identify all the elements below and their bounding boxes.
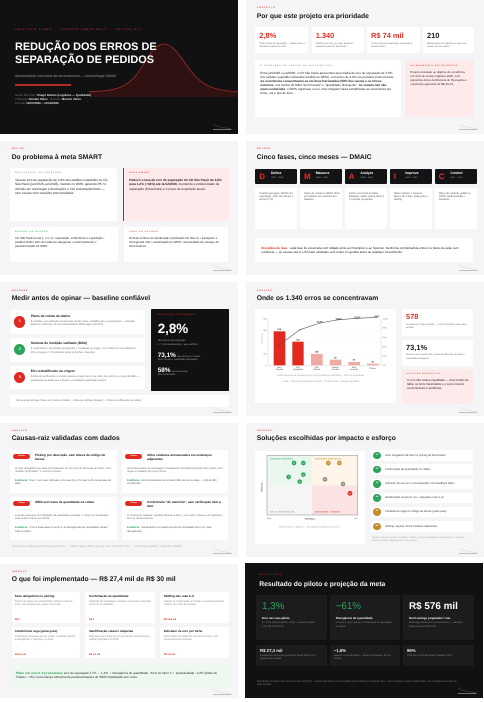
title: Onde os 1.340 erros se concentravam: [257, 295, 378, 302]
accent bar: [15, 84, 71, 86]
card: blind check: Conferência cega (poka-yoke): [15, 629, 57, 633]
list: solution 3: [371, 479, 473, 489]
cause: picking: +46 pts: [18, 455, 25, 457]
phase I: I: [394, 172, 396, 181]
kicker: MÉTODO: [257, 148, 271, 150]
phase C: Control: [450, 171, 462, 175]
list: solution 1: [371, 450, 473, 461]
card: quantity divergence: no turno 3, após reativar a confirmação de quantidade no coletor: [336, 622, 392, 628]
card: stratified error: A folha de verificação no coletor passou a exigir turno, rua, SKU, tipo de item e modo de falha — exatamente as fatias que o Pareto e a Ishikawa exploraram depois.: [31, 375, 140, 382]
cause: WMS: [10, 497, 117, 540]
kicker: RESULTADOS: [259, 574, 282, 576]
card: productivity: [330, 645, 400, 666]
card: visual id: Identificação visual e etiquetas: [89, 629, 133, 633]
panel: impact-effort matrix: GANHOS RÁPIDOS: [270, 457, 293, 460]
cause: similar SKUs: SKUs similares armazenados em endereços adjacentes: [147, 453, 212, 461]
card: error rate: Taxa de erro de separação — média de 6× a referência interna de 0,5%: [259, 42, 305, 48]
card: investment: Investimento das ações priorizadas (limite: R$ 30 mil) = payback de 3 meses: [260, 655, 316, 660]
card: slotting: [160, 592, 229, 623]
project metadata: [15, 93, 91, 105]
card: quantity divergence: Divergência de quantidade: [336, 616, 372, 620]
panel: pareto chart: 92,6%: [336, 318, 342, 320]
slide: solutions: [246, 423, 484, 557]
kicker: DEFINE: [12, 148, 25, 150]
cause: picking: [10, 450, 117, 493]
card: productivity: Impacto na produtividade — dentro do limite de −3% do Charter: [334, 655, 390, 660]
phase A: Pareto por modo de falha, Ishikawa, matriz causa efeito e 5 porquês no gemba: [349, 192, 384, 201]
list: solution 1: Scan obrigatório de EAN no picking de fracionados: [385, 454, 446, 457]
two failure modes: 73,1% dos erros em 2 modos: [158, 352, 200, 359]
card: scan: R$ 0: [15, 618, 20, 620]
panel: pareto chart: 600: [264, 330, 267, 332]
cause: WMS: WMS sem trava de quantidade na coleta: [35, 500, 94, 504]
callout: pilot result: [12, 664, 229, 688]
card: indicator: [160, 627, 229, 658]
slide: cover: [0, 0, 238, 134]
cause: similar SKUs: [122, 450, 228, 493]
panel: impact-effort matrix: B2: [328, 462, 330, 464]
panel: pareto chart: divergente: [293, 369, 303, 371]
title: SEPARAÇÃO DE PEDIDOS: [15, 54, 154, 66]
slide: measure: [0, 282, 238, 416]
panel: impact-effort matrix: alto: [355, 517, 358, 519]
kicker: MEASURE: [12, 290, 28, 292]
slide: results: [245, 563, 483, 698]
panel: pareto chart: 200: [264, 353, 267, 355]
panel: pareto chart: 60: [353, 359, 356, 362]
card: data collection plan: 1: [19, 319, 21, 323]
cause: similar SKUs: +38 pts: [130, 455, 137, 457]
title: Cinco fases, cinco meses — DMAIC: [257, 154, 371, 160]
panel: confirmed baseline: [151, 309, 229, 391]
phase D: 13/07 – 07/08: [271, 177, 283, 179]
kicker: IMPROVE: [12, 570, 28, 572]
title: Medir antes de opinar — baseline confiável: [12, 295, 150, 302]
card: data collection plan: Plano de coleta de dados: [31, 314, 70, 318]
card: blind check: Conferente escaneia sem ver a lista; o sistema aponta a divergência. 2 estações no piloto.: [15, 635, 75, 641]
card: errors per month: 1.340: [316, 30, 334, 40]
icon: logo: [213, 548, 232, 554]
panel: out of scope: [124, 227, 228, 262]
card: complaints: [423, 27, 474, 53]
panel: pareto chart: Item: [352, 367, 356, 369]
card: visual id: R$ 3,2 mil: [89, 653, 100, 656]
card: indicator: Painel diário do WMS lido na troca de turno, com reconhecimento semanal.: [164, 635, 218, 641]
title: Do problema à meta SMART: [12, 154, 102, 160]
icon: logo: [213, 407, 232, 413]
card: hard savings: R$ 576 mil: [409, 601, 458, 612]
cause: memory check: Evidência: Separadores no quartil superior de velocidade têm 2,3× mais divergências.: [127, 526, 212, 533]
icon: logo: [459, 265, 478, 271]
card: visual id: [85, 627, 155, 658]
phase I: [390, 169, 432, 229]
card: investment: R$ 27,4 mil: [260, 648, 282, 653]
list: solution 6: B3: [376, 525, 378, 527]
callout: phase discipline: [255, 238, 473, 262]
list: solution 1: A1: [376, 454, 378, 456]
card: scan: Trecho de coleta reparametrizado: sistema reduz de 0,5%, com bloqueio de avanço sem scan.: [15, 600, 73, 606]
card: data collection plan: [10, 310, 145, 334]
panel: pareto chart: 168: [315, 351, 319, 354]
card: quantity: R$ 0: [89, 618, 94, 620]
panel: impact-effort matrix: DESCARTE / REVER: [315, 510, 340, 513]
panel: pareto chart: 40: [372, 361, 374, 363]
list: solution 5: [371, 507, 473, 517]
card: productivity: −1,8%: [334, 648, 346, 653]
card: OTIF: [403, 645, 474, 666]
card: visual id: Etiquetas com código de cor por família, demarcação e padrão fotográfico no POP.: [89, 635, 150, 641]
panel: pareto chart: 800: [264, 318, 267, 320]
card: cost: [367, 27, 420, 53]
panel: pareto chart: Pareto dos erros de separação por modo de falha (ocorrências) — linha: % acumulado.: [277, 375, 365, 377]
phase M: 10/08 – 11/09: [316, 177, 328, 179]
panel: executive reading: [402, 369, 473, 404]
phase C: 23/11 – 11/12: [450, 177, 462, 179]
card: scan: Scan obrigatório no picking: [15, 594, 54, 598]
panel: impact-effort matrix: baixo: [267, 517, 272, 519]
panel: pareto chart: Fonte: 1.340 erros registrados no WMS · CD São Paulo · baseline ago/2026: [283, 381, 359, 383]
card: hard savings: Hard savings projetados / ano: [409, 616, 450, 620]
card: measurement system: Sistema de medição validado (MSA): [31, 341, 87, 345]
phase I: 19/10 – 20/11: [405, 177, 417, 179]
footer: tools: [10, 395, 229, 407]
list: solution 2: [371, 464, 473, 475]
card: pilot error: vs. 4,7% antes do piloto (−69%) — meta do projeto: 1,2% até 11/12/2026: [262, 622, 315, 628]
phase M: Measure: [316, 171, 329, 175]
panel: pareto chart: SKU: [315, 367, 319, 369]
panel: impact-effort matrix: D1: [349, 492, 351, 494]
kicker: ANALYZE: [257, 290, 273, 292]
card: slotting: Análise de similaridade em família e reendereçamento noturno em 2 fins de semana.: [164, 600, 224, 606]
title: Resultado do piloto e projeção da meta: [259, 580, 385, 588]
card: indicator: R$ 0,8 mil: [164, 653, 175, 656]
list: solution 3: Indicador de erro por turno/separador com feedback diário: [385, 482, 454, 485]
phase M: M: [304, 172, 311, 181]
panel: pareto chart: avariado: [350, 369, 359, 371]
slide: define: [0, 141, 238, 275]
panel: in scope: DENTRO DO ESCOPO: [15, 231, 49, 233]
card: cost: R$ 74 mil: [371, 30, 404, 40]
card: OTIF: 96%: [407, 648, 416, 653]
cause: memory check: [122, 497, 228, 540]
panel: pareto chart: 92: [334, 357, 337, 359]
list: solution 2: Confirmação de quantidade no coletor: [385, 468, 431, 471]
kicker: IMPROVE: [257, 430, 273, 432]
panel: problem statement: [10, 168, 117, 221]
phase I: Matriz esforço × impacto, kaizen de 5 dias, poka-yoke e slotting: [394, 192, 428, 201]
kicker: ANALYZE: [12, 430, 28, 432]
card: errors per month: [312, 27, 364, 53]
title: Por que este projeto era prioridade: [257, 12, 369, 20]
card: complaints: Reclamações de clientes por mês com causa “erro no pedido”: [427, 42, 466, 48]
panel: SMART goal: Reduzir a taxa de erro de separação do CD São Paulo de 2,8% para 1,2% (−64%) até 11/12/2026, mantendo a produtividade de separação (linhas/hora) e o prazo de expedição atuais.: [129, 178, 222, 191]
list: solution 5: B2: [376, 510, 378, 512]
card: stratified error: [10, 366, 145, 389]
card: pilot error: 1,3%: [262, 601, 284, 612]
card: 578: Amostras por “item trocado” — 43,1% do total e maior falha isolada: [406, 324, 467, 329]
panel: executive reading: O erro não estava espalhado — dois modos de falha, os itens fracionados e o turno noturno concentravam o problema.: [407, 378, 469, 390]
panel: pareto chart: 20%: [383, 355, 387, 358]
cause: picking: O scan obrigatório na coleta foi desativado em um pico de demanda de 2024, como medida “temporária”, e nunca foi revisto.: [15, 466, 111, 473]
card: slotting: R$ 14,8 mil: [164, 618, 176, 620]
phase C: [435, 169, 477, 229]
icon: logo: [458, 688, 476, 694]
panel: pareto chart: Item: [278, 367, 282, 369]
panel: in scope: [10, 227, 118, 262]
list: solution 4: [371, 493, 473, 503]
panel: out of scope: FORA DO ESCOPO: [129, 231, 158, 233]
card: errors per month: Pedidos com erro por mês, de 48 mil expedidos pelo CD São Paulo: [316, 42, 353, 48]
title: O que foi implementado — R$ 27,4 mil de R$ 30 mil: [12, 576, 176, 583]
phase A: 14/09 – 16/10: [360, 177, 373, 179]
card: 73,1%: dos erros em apenas dois modos de falha: item trocado e quantidade divergente: [406, 354, 465, 360]
slide: root causes: [0, 423, 238, 557]
icon: logo: [459, 407, 478, 413]
list: solution 4: Identificação visual por cor + etiquetas (ruas 5–9): [385, 496, 444, 499]
phase M: Plano de coleta no WMS, MSA por atributo na conferência e baseline: [304, 192, 339, 201]
icon: logo: [213, 689, 232, 695]
phase A: A: [349, 172, 354, 181]
list: solution 3: A3: [376, 482, 378, 484]
title: REDUÇÃO DOS ERROS DE: [15, 40, 157, 52]
panel: pareto chart: 0%: [383, 365, 386, 367]
card: pilot error: [256, 595, 327, 640]
project metadata: Período 13/07/2026 – 11/12/2026: [15, 101, 59, 105]
chart: bell curve: [89, 44, 238, 97]
card: error rate: [255, 27, 308, 53]
kicker: LEAN SEIS SIGMA · PROJETO GREEN BELT · GB-2026-031: [15, 29, 142, 31]
list: solution 4: A4: [376, 496, 378, 498]
cause: WMS: Evidência: Com a trava ativa no turno 3, as divergências de quantidade caíram 61% no piloto.: [15, 526, 107, 533]
panel: executive reading: LEITURA EXECUTIVA: [407, 373, 441, 375]
panel: strategic alignment: [405, 60, 474, 117]
panel: pareto chart: 402: [297, 339, 300, 341]
panel: pareto chart: invertido: [332, 369, 340, 371]
cause: similar SKUs: Itens fracionados de embalagem visualmente semelhante ficavam lado a lado, sem regra no cadastro de novos SKUs.: [127, 466, 223, 473]
fractioned items: itens fracionados: [158, 374, 175, 376]
panel: pareto chart: Pedido: [332, 367, 339, 369]
panel: in scope: CD São Paulo (ruas 1, 2 e 3) • separação, conferência e expedição • pedidos B2B e B2C de todas as categorias • endereçamento e parametrização do WMS: [15, 236, 104, 248]
card: quantity divergence: [330, 595, 400, 640]
list: solution 6: [371, 521, 473, 532]
panel: problem: Entre jan/2026 e jun/2026, o CD São Paulo apresentou taxa média de erro de separação de 2,8% dos pedidos expedidos (baseline medido no WMS), com picos de 3,6% em períodos promocionais. As ocorrências concentravam-se em itens fracionados (58% dos casos) e os turnos noturnos, nos modos de falha “item trocado” e “quantidade divergente”. As causas-raiz não eram conhecidas: o WMS registrava o erro, mas ninguém havia estratificado as ocorrências por turno, rua e tipo de item.: [260, 71, 394, 95]
icon: logo: [213, 124, 232, 130]
card: investment: [256, 645, 327, 666]
panel: impact-effort matrix: C2: [342, 483, 344, 485]
cause: WMS: +34 pts: [18, 502, 25, 504]
panel: pareto chart: 578: [278, 329, 282, 331]
panel: out of scope: Demais centros de distribuição (replicação em fase 2) • transporte e entrega last mile • substituição do WMS • acuracidade de estoque de fornecedores: [129, 236, 219, 248]
panel: pareto chart: 100%: [383, 318, 388, 320]
panel: pareto chart: 0: [266, 365, 267, 367]
baseline note: [158, 339, 198, 346]
card: quantity: [85, 592, 155, 623]
panel: impact-effort matrix: B3: [339, 462, 341, 464]
panel: impact-effort matrix: GRANDES PROJETOS: [315, 458, 342, 460]
panel: pareto chart: trocado: [276, 369, 283, 371]
panel: impact-effort matrix: ESFORÇO →: [305, 518, 318, 520]
card: cost: Custo mensal de reentrega, devolução e ressarcimento: [371, 42, 412, 48]
callout: phase discipline: Disciplina de fase: cada fase foi encerrada com tollgate junto ao Champion e ao Sponsor. Nenhuma contramedida entrou no plano de ação sem evidência — as causas-raiz A e B foram validadas com testes no gemba antes de qualquer investimento.: [261, 246, 459, 254]
project metadata: Champion Renata Sales Sponsor Marcos Vieira: [15, 97, 81, 101]
slide: context: [246, 0, 484, 134]
panel: pareto chart: 85,7%: [317, 321, 323, 323]
panel: impact-effort matrix: Matriz Esforço × Impacto — 10 soluções avaliadas pelo kaizen: [279, 525, 340, 528]
panel: pareto chart: 40%: [383, 346, 387, 348]
panel: strategic alignment: Projeto vinculado ao objetivo de excelência em nível de serviço logístico 2026, com patrocínio direto da Diretoria de Operações e orçamento aprovado de R$ 30 mil.: [410, 70, 467, 86]
card: quantity divergence: −61%: [336, 601, 361, 612]
card: pilot error: Erro nas ruas-piloto: [262, 616, 289, 620]
panel: pareto chart: 97,0%: [355, 317, 361, 319]
cause: WMS: A tarefa avançava sem digitação da quantidade coletada: o campo foi desativado para reduzir toques por tarefa.: [15, 514, 108, 520]
card: 73,1%: 73,1%: [406, 343, 427, 352]
footer: tools: Ferramentas da fase: Plano de Coleta de Dados • MSA por atributo (Kappa) • Folha de verificação no coletor: [16, 399, 141, 402]
footer note: Resultados do piloto nas ruas 5–9 (out–nov/2026) · rollout para todo o CD executado com o Plano de Controle ativo · hard savings a serem confirmados com o Financeiro ao fim do Gate Control.: [257, 680, 457, 686]
card: scan: [12, 592, 80, 623]
baseline note: n = 1.340 pedidos/mês · ago–set/2026: [158, 344, 198, 346]
phase D: D: [259, 172, 265, 181]
phase A: Analyze: [360, 171, 373, 175]
panel: impact-effort matrix: C1: [324, 478, 326, 480]
panel: pareto chart: 100%: [374, 316, 380, 318]
footer: tools: Ferramentas: Ishikawa (brainstorming de 38 Xs) → Matriz Causa e Efeito (nota de corte: 120 pts de 270) → 5 Porquês no gemba + testes de validação: [12, 545, 182, 548]
slide: implemented: [0, 564, 238, 698]
card: measurement system: [10, 338, 145, 362]
cause: picking: Evidência: Rua 7 com scan replicado: erro caiu de 4,7% para 1,2% na semana de teste.: [15, 479, 111, 485]
panel: pareto chart: Ocorrências: [261, 334, 263, 344]
kicker: CONTEXTO: [257, 7, 275, 9]
panel: pareto chart: 80%: [383, 327, 387, 330]
title: [15, 40, 157, 66]
slide: pareto: [246, 282, 484, 416]
cause: memory check: Conferência “de memória”, sem verificação item a item: [147, 500, 221, 508]
icon: logo: [459, 124, 478, 130]
phase D: [255, 169, 297, 229]
title: Causas-raiz validadas com dados: [12, 435, 120, 442]
card: 578: 578: [406, 312, 418, 321]
phase A: [345, 169, 387, 229]
card: hard savings: [403, 595, 474, 640]
phase M: [300, 169, 342, 229]
panel: impact-effort matrix: A4: [288, 476, 290, 478]
card: stratified error: 3: [19, 375, 21, 379]
title: Soluções escolhidas por impacto e esforço: [257, 435, 396, 442]
panel: impact-effort matrix: [255, 451, 365, 544]
cause: memory check: +30 pts: [130, 502, 137, 504]
card: error rate: 2,8%: [259, 30, 276, 40]
panel: impact-effort matrix: A2: [303, 462, 305, 464]
card: stratified error: Erro estratificado na origem: [31, 369, 75, 373]
panel: impact-effort matrix: IMPACTO →: [261, 480, 264, 491]
card: blind check: [12, 627, 80, 658]
two failure modes: (item trocado + quantidade divergente): [158, 359, 198, 361]
panel: pareto chart: [255, 309, 396, 403]
card: OTIF: OTIF pós no CD São Paulo (baseline: 91%): [407, 655, 452, 657]
card: 73,1%: [402, 340, 473, 366]
baseline note: Taxa de erro de separação: [158, 340, 185, 342]
phase I: Improve: [405, 171, 419, 175]
panel: impact-effort matrix: A1: [293, 462, 295, 464]
panel: pareto chart: faltante: [314, 369, 321, 371]
label: BASELINE CONFIRMADA: [158, 314, 197, 316]
callout: pilot result: Piloto nas ruas 5–9 (3 semanas): erro de separação 4,7% → 1,3% • divergência de quantidade −61% no turno 3 • produtividade −1,8% (limite do Charter: −3%). Governança trimestral de parametrizações do WMS implantada sem custo.: [16, 671, 217, 679]
panel: impact-effort matrix: B1: [299, 481, 301, 483]
panel: strategic alignment: ALINHAMENTO ESTRATÉGICO: [410, 64, 458, 66]
icon: logo: [459, 548, 478, 554]
phase D: Define: [271, 171, 281, 175]
panel: impact-effort matrix: BAIXA PRIORIDADE: [270, 510, 295, 513]
panel: problem statement: DECLARAÇÃO DO PROBLEMA: [15, 172, 62, 174]
project metadata: Green Belt líder Thiago Ramos (Logística — Qualidade): [15, 93, 91, 97]
card: measurement system: 2: [19, 347, 21, 351]
card: measurement system: 6 conferentes × 30 pedidos preparados × 3 rodadas às cegas, com critério de concordância ≥ 90% e Kappa ≥ 0,75 atendido antes de fechar o baseline.: [31, 347, 136, 354]
card: quantity: Digitação de quantidade coletada com dupla verificação acima de 10 unidades.: [89, 600, 151, 606]
panel: SMART goal: [123, 168, 229, 221]
card: hard savings: Reentrega, devolução e ressarcimento — validação Financeira em 09/07/2026: [409, 622, 462, 628]
panel: problem: [255, 60, 401, 117]
fractioned items: 58% dos erros eram: [158, 367, 187, 374]
note: legend: Verde: quick wins (piloto imediato) · Âmbar: projetos estratégicos decorrentes no Improve · Cinza/vermelho: registrados fora do projeto: [372, 536, 466, 542]
panel: pareto chart: 60%: [383, 337, 387, 339]
list: solution 2: A2: [376, 468, 378, 470]
cause: picking: Picking por descrição, sem leitura de código de barras: [35, 453, 105, 461]
subtitle: Apresentação executiva de encerramento — metodologia DMAIC: [15, 74, 117, 78]
big number: 2,8%: [158, 321, 188, 336]
card: indicator: Indicador de erro por turno: [164, 629, 202, 633]
phase D: Charter aprovado, SIPOC da expedição, VOC de clientes e árvore CTQ: [259, 192, 293, 201]
card: complaints: 210: [427, 30, 439, 40]
cause: memory check: O conferente validava o pedido olhando a lista, o que reduz a chance de capturar o erro na última barreira.: [127, 514, 223, 520]
panel: problem: O PROBLEMA NO CENTRO DE DISTRIBUIÇÃO: [260, 64, 333, 66]
panel: impact-effort matrix: A3: [303, 474, 305, 476]
slide: method DMAIC: [246, 141, 484, 275]
cause: similar SKUs: Evidência: Itens fracionados concentram 58% dos erros vitais — 568 de 980 ocorrências.: [127, 479, 217, 485]
card: 578: [402, 309, 473, 336]
card: slotting: Slotting das ruas 5–9: [164, 594, 194, 598]
card: blind check: R$ 8,6 mil: [15, 653, 26, 656]
panel: problem statement: Taxa de erro de separação de 2,8% dos pedidos expedidos no CD São Paulo (jan/2026–jun/2026), medido no WMS, gerando R$ 74 mil/mês em reentregas e devoluções e 210 reclamações/mês — sem causas nem soluções preconcebidas.: [15, 178, 108, 195]
card: data collection plan: 8 medidas com definição operacional escrita, fonte, estratificação e responsável — extração diária de 100% dos +3.200 pedidos/dia do WMS (ago–set/2026).: [31, 320, 135, 326]
panel: pareto chart: Outros: [370, 368, 376, 370]
icon: logo: [213, 265, 232, 271]
list: solution 6: Slotting: separar SKUs similares adjacentes: [385, 525, 437, 528]
panel: SMART goal: META SMART: [129, 172, 150, 174]
panel: pareto chart: Qtd.: [296, 367, 300, 369]
list: solution 5: Conferência cega por código de barras (poka-yoke): [385, 510, 446, 513]
card: quantity: Confirmação de quantidade: [89, 594, 129, 598]
phase C: C: [439, 172, 444, 181]
phase C: Plano de controle, gráfico p, OCAP, padronização e handover: [439, 192, 471, 201]
